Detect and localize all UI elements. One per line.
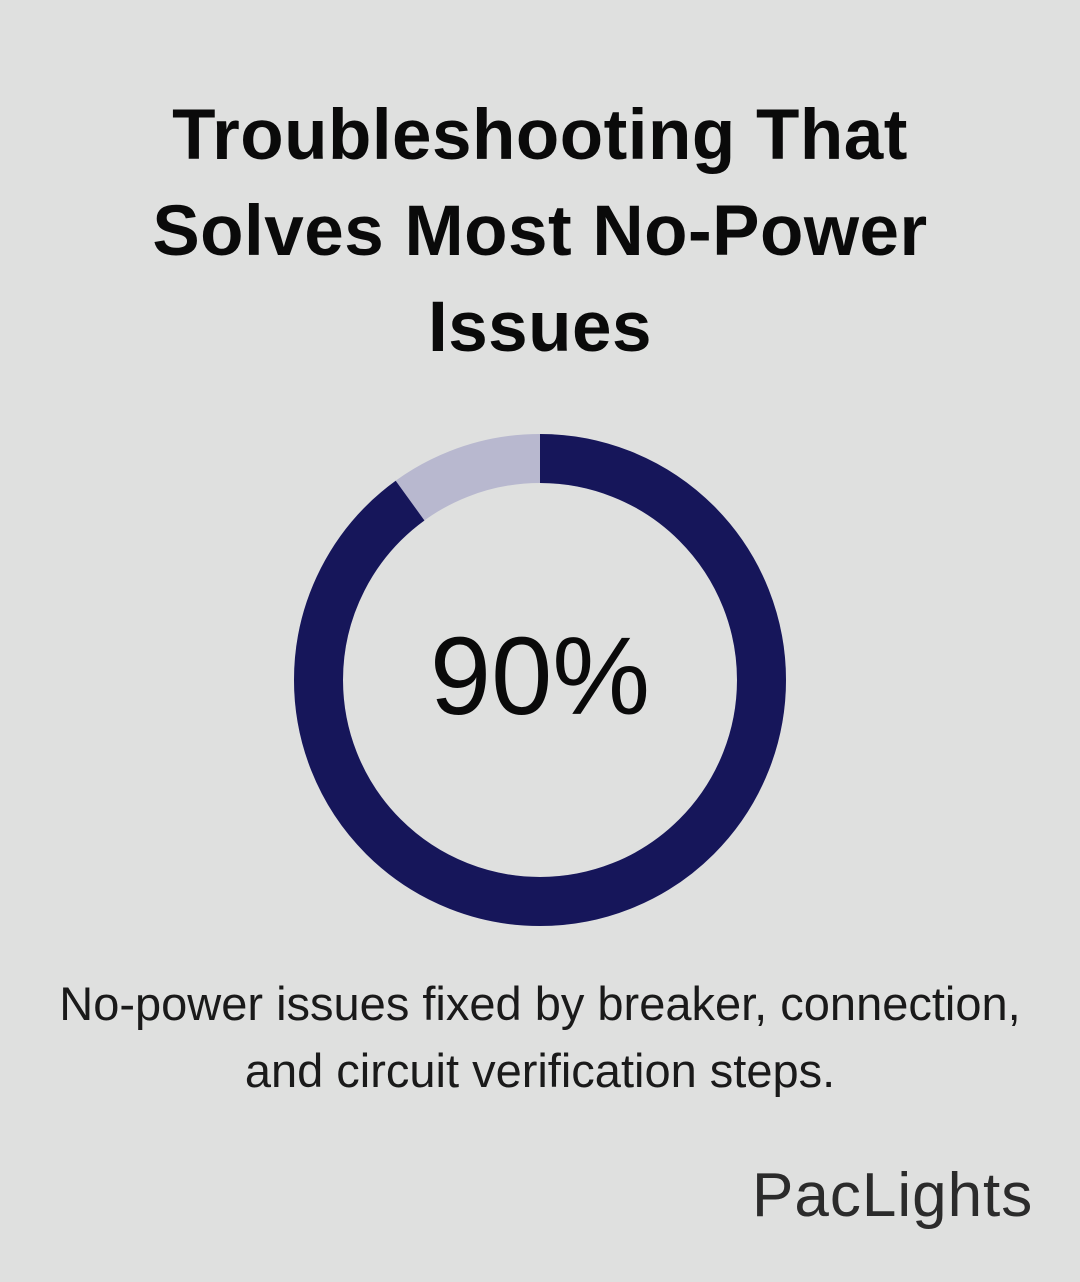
value label: 90%	[430, 615, 650, 738]
90% segment	[318, 458, 762, 902]
donut chart	[294, 434, 786, 926]
title: Troubleshooting That	[172, 96, 908, 175]
remaining segment	[318, 458, 762, 902]
title: Solves Most No-Power	[152, 192, 928, 271]
logo: PacLights	[752, 1161, 1033, 1230]
title: Issues	[428, 288, 652, 367]
caption: and circuit verification steps.	[245, 1044, 835, 1097]
caption	[59, 977, 1021, 1097]
caption: No-power issues fixed by breaker, connection,	[59, 977, 1021, 1030]
title	[152, 96, 928, 367]
